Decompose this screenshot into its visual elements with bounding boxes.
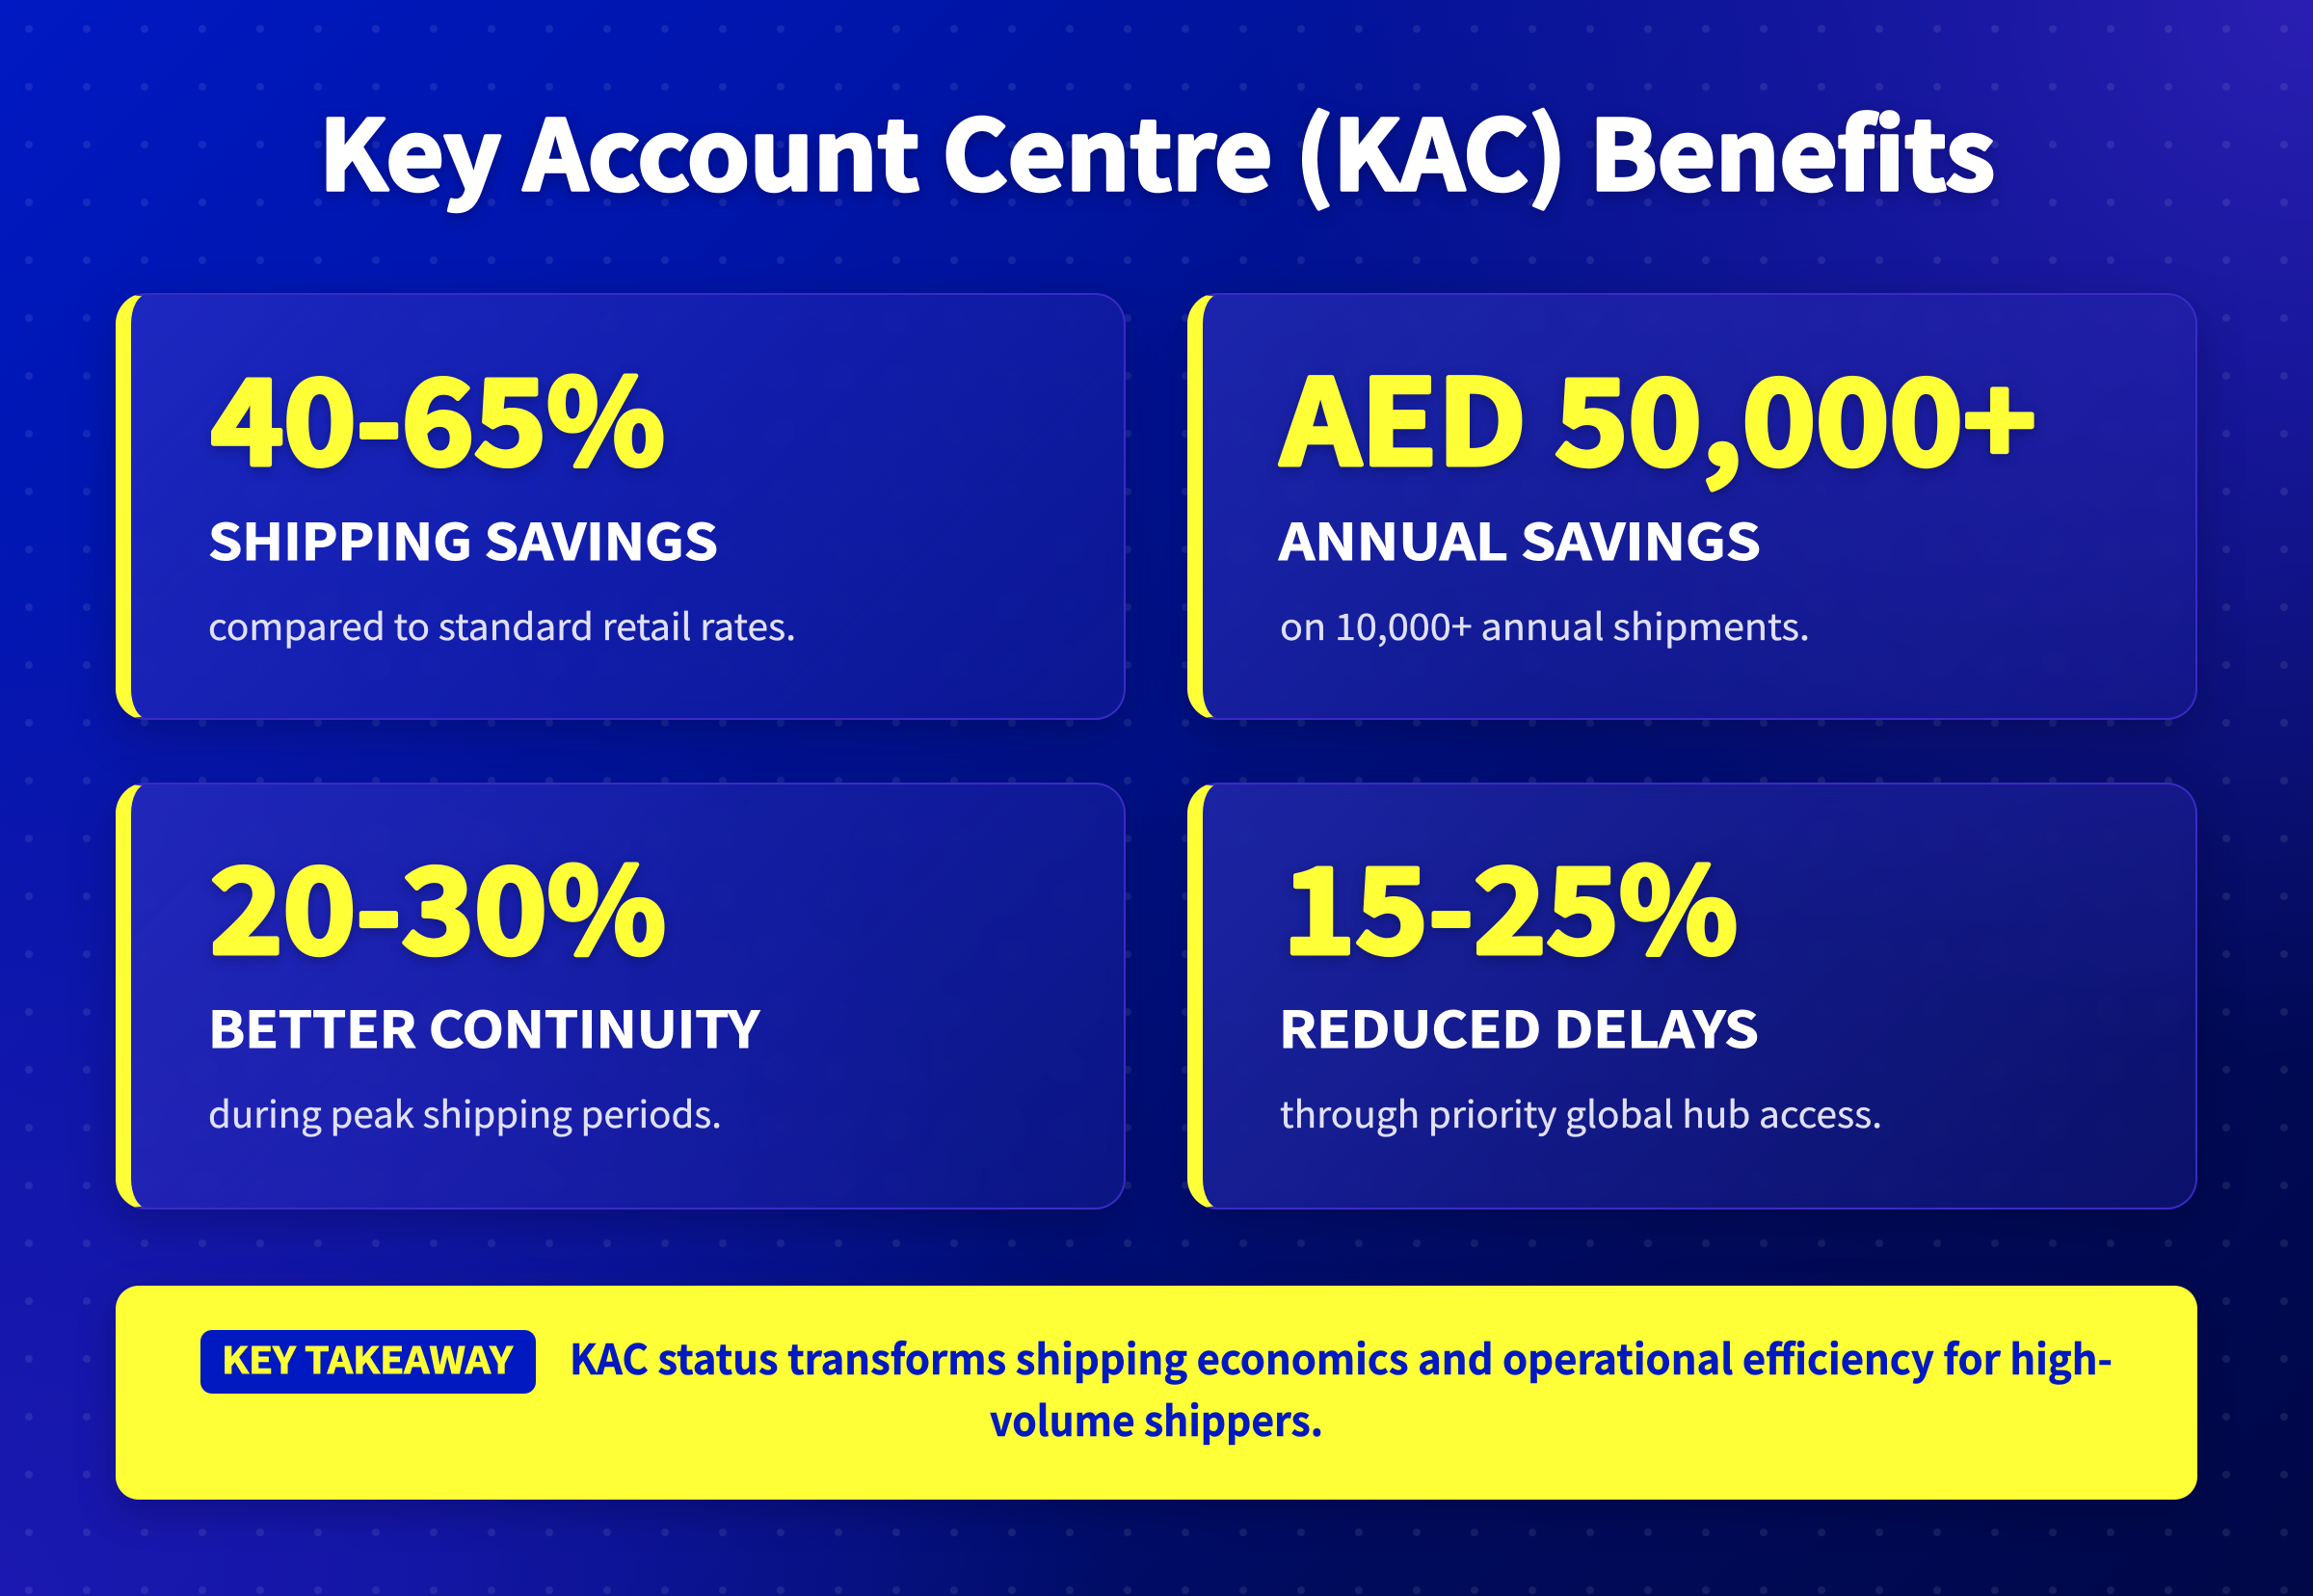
description: during peak shipping periods. xyxy=(208,1085,722,1138)
description: compared to standard retail rates. xyxy=(208,598,796,651)
title: Key Account Centre (KAC) Benefits xyxy=(319,78,1995,218)
label: reduced delays: REDUCED DELAYS xyxy=(1279,990,1759,1062)
description: on 10,000+ annual shipments. xyxy=(1280,598,1810,651)
stat: 20-30%: 20-30% xyxy=(210,817,666,988)
panel: annual savings xyxy=(1187,293,2197,720)
takeaway text: volume shippers. xyxy=(990,1389,1323,1449)
label: shipping savings: SHIPPING SAVINGS xyxy=(208,502,718,574)
description: through priority global hub access. xyxy=(1280,1085,1882,1138)
callout: key takeaway xyxy=(116,1286,2197,1500)
label: better continuity: BETTER CONTINUITY xyxy=(208,990,760,1062)
stat: 15-25%: 15-25% xyxy=(1283,817,1738,988)
stat: AED 50,000+: AED 50,000+ xyxy=(1280,329,2036,499)
badge: key takeaway: KEY TAKEAWAY xyxy=(222,1331,514,1384)
panel: better continuity xyxy=(116,783,1126,1210)
badge: key takeaway xyxy=(200,1330,536,1394)
panel: reduced delays xyxy=(1187,783,2197,1210)
takeaway text xyxy=(570,1327,2113,1449)
panel: shipping savings xyxy=(116,293,1126,720)
label: annual savings: ANNUAL SAVINGS xyxy=(1278,502,1761,574)
takeaway text: KAC status transforms shipping economics and operational efficiency for high- xyxy=(570,1327,2113,1387)
stat: 40-65%: 40-65% xyxy=(211,329,665,499)
